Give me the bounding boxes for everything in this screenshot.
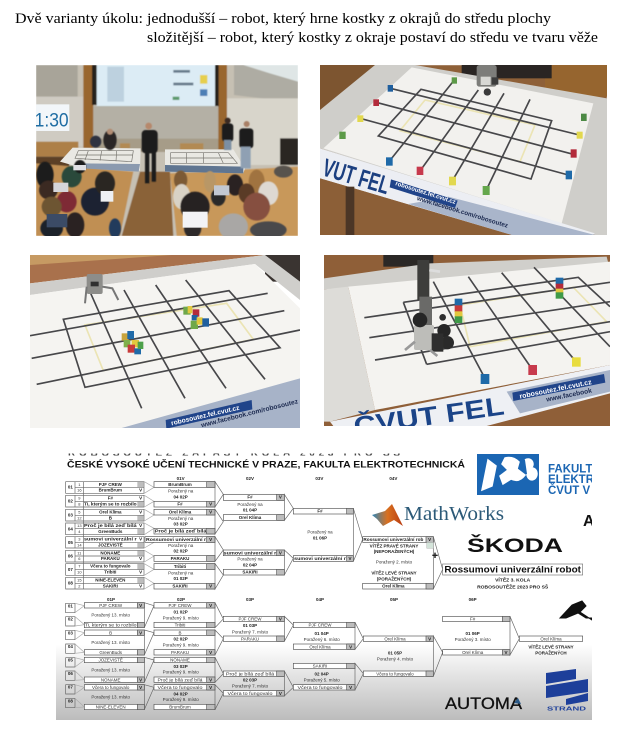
round 02P: NONAME	[170, 658, 190, 663]
round 04V final: V	[428, 537, 431, 542]
group markers: 01	[68, 603, 73, 608]
round 04V final: (PORAŽENÝCH)	[377, 574, 412, 581]
round 01P: Poražený 13. místo	[91, 613, 130, 618]
group markers	[66, 603, 84, 708]
heading label: Dvě varianty úkolu:	[15, 11, 143, 27]
round 01P: NINE-ELEVEN	[96, 704, 126, 709]
round headers	[176, 477, 398, 480]
group markers: 07	[68, 685, 73, 690]
round 02P: Poražený 9. místo	[163, 642, 199, 647]
first round matches: 6	[78, 556, 81, 561]
round 01V: V	[209, 509, 212, 514]
round 03P	[223, 616, 293, 696]
round headers: 05P	[390, 597, 398, 602]
round 05P: 01 05P	[388, 651, 402, 656]
table sign: www.facebook.com/robosoutez	[199, 398, 299, 430]
slide title: ČESKÉ VYSOKÉ UČENÍ TECHNICKÉ V PRAZE, FAKULTA ELEKTROTECHNICKÁ	[67, 458, 465, 470]
round 04V final: Rossumovi univerzální rob	[363, 537, 424, 542]
round headers: 03P	[246, 597, 254, 602]
round 01P: Ti, kterým se to rozbilo	[85, 623, 137, 628]
round 03V: sumovi univerzální r	[294, 556, 346, 561]
round 04V final: VÍTĚZ PRAVÉ STRANY	[370, 541, 418, 548]
round 02P: 01 02P	[174, 609, 188, 614]
round 05P: Orel Klíma	[384, 636, 406, 641]
first round matches: V	[139, 495, 142, 500]
first round matches: 14	[77, 542, 82, 547]
table sign: robosoutez.fel.cvut.cz	[394, 181, 456, 206]
group markers: 05	[68, 658, 73, 663]
round 02P: Tribiti	[175, 623, 185, 628]
first round matches: V	[139, 523, 142, 528]
round 02V: Poražený na	[237, 502, 263, 507]
first round matches	[66, 482, 154, 589]
table left	[60, 148, 141, 171]
logo: Strand	[546, 669, 588, 712]
overall winner: Rossumovi univerzální robot	[444, 564, 581, 574]
round 01P: B	[109, 630, 112, 635]
round 01V: V	[209, 537, 212, 542]
overall winner: VÍTĚZ 3. KOLA	[495, 575, 531, 583]
round 01P: Poražený 13. místo	[91, 694, 130, 699]
first round matches: sumovi univerzální r	[84, 537, 137, 542]
cube tower near	[455, 299, 462, 323]
round 06P: Poražený 3. místo	[455, 637, 491, 642]
round 05P: Včera to fungovalo	[376, 671, 414, 676]
round 06P: V	[504, 650, 507, 655]
first round matches: 15	[77, 577, 82, 582]
photo: robot building a cube tower	[324, 255, 610, 441]
photo: game board with cubes on the edges	[319, 65, 607, 235]
first round matches: 7	[78, 564, 81, 569]
round 01V: Poražený na	[168, 489, 194, 494]
round 01P: Poražený 13. místo	[91, 640, 130, 645]
variant one text: jednodušší – robot, který hrne kostky z okrajů do středu plochy	[146, 11, 552, 27]
round 03P: Včera to fungovalo	[227, 691, 273, 696]
round 04P: Včera to fungovalo	[297, 685, 343, 690]
first round matches: PJF CREW	[99, 482, 123, 487]
round headers: 04P	[316, 597, 324, 602]
round 04V final: Orel Klíma	[382, 584, 405, 589]
round 01P: V	[139, 630, 142, 635]
round 02V: sumovi univerzální r	[224, 550, 277, 555]
logo: Škoda: ŠKODA	[467, 535, 563, 557]
logo: MathWorks: MathWorks	[404, 503, 504, 525]
first round matches: 07	[68, 567, 73, 572]
first round matches: 01	[68, 485, 73, 490]
table sign: www.facebook	[545, 387, 593, 404]
logo text: faculty: ČVUT V PRAZE	[548, 484, 633, 497]
logo: MathWorks	[372, 503, 504, 526]
round 04V final: Poražený 2. místo	[376, 559, 413, 564]
table sign: VUT FEL	[319, 154, 393, 200]
first round matches: 1	[78, 482, 81, 487]
board grid	[364, 267, 610, 378]
round 01V: F#	[177, 502, 183, 507]
round 05P	[363, 636, 443, 676]
round 03V: F#	[317, 509, 323, 514]
round 03P: PJF CREW	[239, 617, 262, 622]
first round matches: BrumBrum	[99, 488, 122, 493]
round 04P: Poražený 6. místo	[304, 637, 340, 642]
first round matches: 16	[77, 488, 82, 493]
logo: Automa: AUTOMA	[445, 694, 523, 713]
first round matches: 02	[68, 499, 73, 504]
first round matches: Ti, kterým se to rozbilo	[84, 501, 137, 506]
first round matches: NONAME	[100, 550, 120, 555]
round 03V: V	[348, 556, 351, 561]
round 01P: Včera to fungovalo	[92, 685, 130, 690]
first round matches: 12	[77, 515, 82, 520]
round 01P: V	[139, 677, 142, 682]
table sign: robosoutez.fel.cvut.cz	[171, 405, 241, 427]
first round matches: PARAKU	[101, 556, 120, 561]
round 02P: Poražený 9. místo	[163, 697, 199, 702]
first round matches: Tribiti	[104, 570, 116, 575]
round 03P: Poražený 7. místo	[232, 629, 269, 634]
round 02P: 03 02P	[174, 664, 188, 669]
round 02P: V	[209, 685, 212, 690]
round 02P	[154, 603, 223, 710]
logo text: faculty	[548, 464, 634, 497]
first round matches: 11	[77, 550, 82, 555]
round 01V: Poražený na	[168, 543, 194, 548]
round 01V: PARAKU	[171, 556, 189, 561]
round 02V	[223, 494, 293, 575]
round 04P: Poražený 5. místo	[304, 678, 340, 683]
cropped slide heading remnant: ROBOSOUTĚŽ ZÁPASY KOLA 2023 PRO SŠ	[68, 446, 400, 459]
first round matches: Včera to fungovalo	[90, 564, 131, 569]
round 04P: 02 04P	[315, 672, 329, 677]
overall winner: ROBOSOUTĚŽE 2023 PRO SŠ	[477, 582, 549, 590]
round 03P: 02 03P	[243, 678, 257, 683]
first round matches: 10	[77, 570, 82, 575]
round headers: 01P	[107, 597, 115, 602]
timer display: 1:30	[35, 111, 69, 132]
robot	[477, 65, 498, 96]
first round matches: 03	[68, 513, 73, 518]
logo: Strand: STRAND	[547, 706, 586, 712]
round 01P: NONAME	[101, 677, 121, 682]
first round matches: 2	[78, 583, 81, 588]
round 02V: SAKIRI	[242, 570, 258, 575]
first round matches: 5	[78, 509, 81, 514]
round 01V	[145, 482, 223, 589]
round 01V: BrumBrum	[168, 482, 192, 487]
round 02P: V	[209, 650, 212, 655]
round 02P: B	[178, 630, 181, 635]
logo: racing emblem	[560, 601, 592, 620]
round 03P: PARAKU	[241, 636, 259, 641]
cube cluster left	[122, 331, 143, 354]
losers final: VÍTĚZ LEVÉ STRANY	[528, 642, 574, 649]
round 01V: V	[209, 502, 212, 507]
round 01V: Orel Klíma	[169, 509, 192, 514]
table sign	[325, 158, 508, 228]
first round matches: V	[139, 488, 142, 493]
round 01P: JOZEVISTĚ	[98, 656, 123, 663]
round 04P: V	[349, 644, 352, 649]
round 01V: SAKIRI	[172, 584, 188, 589]
round 02P: Poražený 9. místo	[163, 615, 199, 620]
round 02V: Orel Klíma	[239, 515, 262, 520]
round 02P: Proč je bílá zeď bílá	[157, 677, 203, 682]
round headers: 03V	[315, 476, 323, 481]
round 02P: 02 02P	[174, 637, 188, 642]
round 04V final: (NEPORAŽENÝCH)	[374, 547, 415, 554]
coloured cubes	[339, 77, 587, 195]
round 04P: 01 04P	[315, 631, 329, 636]
round headers: 02P	[177, 597, 185, 602]
first round matches: 4	[78, 529, 81, 534]
round 04P: PJF CREW	[309, 623, 332, 628]
losers bracket	[66, 597, 583, 710]
cube tower far	[556, 278, 563, 299]
table right	[165, 149, 245, 173]
first round matches: V	[139, 583, 142, 588]
round headers: 02V	[246, 476, 254, 481]
round 03P: V	[279, 617, 282, 622]
round 02P: PARAKU	[171, 650, 189, 655]
round 04V final	[363, 537, 443, 589]
round 01P: Poražený 13. místo	[91, 667, 130, 672]
round 02P: V	[209, 677, 212, 682]
round headers: 06P	[469, 597, 477, 602]
round 02P: Poražený 9. místo	[163, 670, 199, 675]
heading: task variants	[15, 11, 598, 46]
first round matches: 8	[78, 501, 81, 506]
round 02V: V	[279, 495, 282, 500]
round 01P: PJF CREW	[99, 603, 123, 608]
round 01V: Tribiti	[174, 564, 186, 569]
round 03V: 01 06P	[313, 536, 327, 541]
round 03P: V	[279, 691, 282, 696]
group markers: 03	[68, 630, 73, 635]
round 02P: 04 02P	[174, 691, 188, 696]
first round matches: 08	[68, 581, 73, 586]
round 05P: V	[428, 636, 431, 641]
table sign: robosoutez.fel.cvut.cz	[519, 379, 593, 401]
first round matches: GreenBuds	[98, 529, 123, 534]
first round matches: 9	[78, 495, 81, 500]
round 01V: Poražený na	[168, 516, 194, 521]
logo: partial A mark: A	[583, 513, 595, 530]
round 03V	[293, 508, 363, 561]
loose cubes	[481, 357, 581, 384]
variant two text: složitější – robot, který kostky z okraje postaví do středu ve tvaru věže	[147, 30, 598, 46]
photo: robot pushing cubes to the centre	[30, 255, 300, 430]
overall winner	[443, 564, 583, 590]
first round matches: 13	[77, 523, 82, 528]
first round matches: NINE-ELEVEN	[95, 577, 125, 582]
round 03V: Poražený na	[307, 530, 333, 535]
first round matches: 04	[68, 526, 73, 531]
round 05P: Poražený 4. místo	[377, 657, 414, 662]
round 01V: Poražený na	[168, 570, 194, 575]
table sign	[354, 374, 606, 426]
board grid	[360, 80, 579, 191]
round 06P: 01 06P	[466, 631, 480, 636]
robot	[405, 260, 454, 356]
cube cluster right	[183, 306, 209, 329]
losers final: PORAŽENÝCH	[535, 649, 567, 656]
tournament bracket slide	[56, 446, 634, 720]
round headers	[107, 598, 476, 601]
group markers: 04	[68, 644, 73, 649]
round 06P: F#	[470, 617, 476, 622]
first round matches: JOZEVISTĚ	[98, 540, 123, 547]
group markers: 02	[68, 617, 73, 622]
first round matches: V	[139, 509, 142, 514]
first round matches: 3	[78, 537, 81, 542]
losers final: Orel Klíma	[540, 636, 562, 641]
round headers: 01V	[177, 476, 185, 481]
round 01V: 04 02P	[174, 494, 188, 499]
round 01V: Rossumovi univerzální r	[146, 537, 206, 542]
board grid	[30, 280, 300, 408]
group markers: 06	[68, 671, 73, 676]
round 04P: V	[349, 685, 352, 690]
first round matches: B	[109, 515, 113, 520]
round 04P: SAKIRI	[313, 664, 327, 669]
losers final	[519, 636, 583, 656]
round 01V: 03 02P	[174, 522, 188, 527]
round 01V: Proč je bílá zeď bílá	[155, 529, 207, 534]
first round matches: 05	[68, 540, 73, 545]
round 02P: V	[209, 603, 212, 608]
round 02V: V	[279, 550, 282, 555]
round 01P: V	[139, 603, 142, 608]
first round matches: Proč je bílá zeď bílá	[84, 523, 137, 528]
winners bracket	[66, 476, 583, 590]
round 01V: V	[209, 584, 212, 589]
round 01V: 01 02P	[174, 576, 188, 581]
first round matches: 06	[68, 554, 73, 559]
first round matches: V	[139, 556, 142, 561]
round 04V final: ✚	[432, 551, 438, 560]
round 02V: F#	[247, 495, 253, 500]
first round matches: V	[139, 570, 142, 575]
round 06P	[443, 616, 519, 655]
round 02V: 01 04P	[243, 508, 257, 513]
round 01P	[84, 603, 154, 710]
round 01P: V	[139, 685, 142, 690]
round 03P: 01 03P	[243, 623, 257, 628]
round 02P: Včera to fungovalo	[157, 685, 203, 690]
round 02V: 02 04P	[243, 562, 257, 567]
robot	[85, 274, 118, 303]
round 03P: Proč je bílá zeď bílá	[226, 671, 275, 676]
photo: lecture hall with audience	[35, 65, 298, 240]
logo text: faculty: FAKULTA	[548, 464, 600, 476]
table sign: www.facebook.com/robosoutez	[415, 195, 509, 230]
round 03P: Poražený 7. místo	[232, 684, 269, 689]
round 01P: GreenBuds	[99, 650, 123, 655]
group markers: 08	[68, 698, 73, 703]
logo: CTU lion	[477, 454, 539, 495]
round 02P: PJF CREW	[169, 603, 192, 608]
round 04V final: VÍTĚZ LEVÉ STRANY	[371, 568, 417, 575]
round 02P: BrumBrum	[169, 704, 191, 709]
round 04P	[293, 622, 363, 690]
round 02V: Poražený na	[237, 557, 263, 562]
round 01V: 02 02P	[174, 549, 188, 554]
round headers: 04V	[389, 476, 397, 481]
table sign: ČVUT FEL	[352, 390, 506, 441]
first round matches: F#	[108, 495, 113, 500]
first round matches: Orel Klíma	[99, 509, 122, 514]
first round matches: SAKIRI	[103, 583, 118, 588]
round 04P: Orel Klíma	[309, 644, 331, 649]
round 06P: Orel Klíma	[462, 650, 484, 655]
first round matches: V	[139, 537, 142, 542]
